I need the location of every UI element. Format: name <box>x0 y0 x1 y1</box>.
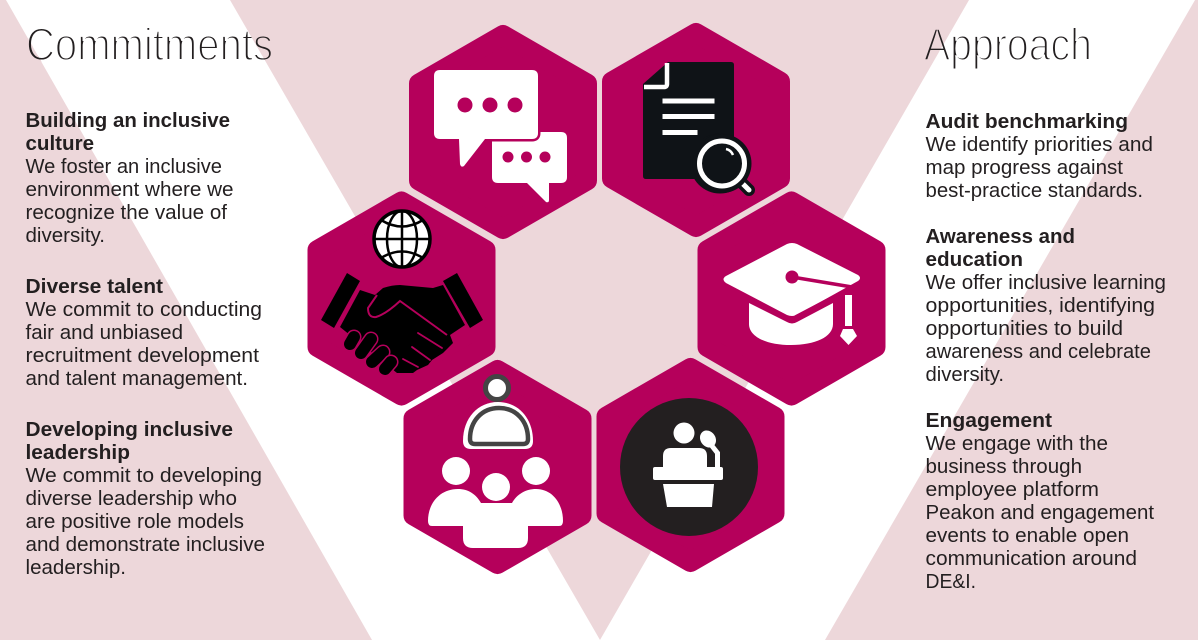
icon: graduation cap <box>724 243 860 345</box>
text block: audit benchmarking <box>926 111 1153 202</box>
icon: document with magnifier <box>643 62 752 194</box>
text block: developing inclusive leadership: and demonstrate inclusive <box>26 534 265 556</box>
panel: approach <box>924 19 1166 593</box>
text block: building an inclusive culture: culture <box>26 133 94 155</box>
text block: building an inclusive culture: environment where we <box>26 179 234 201</box>
hexagon: chat <box>419 35 587 229</box>
text block: engagement: business through <box>926 456 1082 478</box>
text block: audit benchmarking: map progress against <box>926 157 1123 179</box>
text block: building an inclusive culture: Building an inclusive <box>26 110 230 132</box>
hexagon: graduation cap <box>708 202 876 396</box>
text block: diverse talent: Diverse talent <box>26 276 163 298</box>
panel: commitments <box>26 19 273 579</box>
text block: diverse talent: We commit to conducting <box>26 299 262 321</box>
text block: developing inclusive leadership: leadership <box>26 442 130 464</box>
text block: building an inclusive culture: recognize the value of <box>26 202 227 224</box>
hexagon: audience <box>414 370 582 564</box>
text block: awareness and education: opportunities, identifying <box>926 295 1155 317</box>
icon: speaker at podium <box>620 398 758 536</box>
hexagon: document <box>612 33 780 227</box>
text block: engagement <box>926 410 1154 593</box>
text block: engagement: DE&I. <box>926 571 976 593</box>
text block: engagement: communication around <box>926 548 1137 570</box>
text block: awareness and education: diversity. <box>926 364 1004 386</box>
text block: building an inclusive culture: diversity. <box>26 225 105 247</box>
text block: awareness and education <box>926 226 1166 386</box>
hexagon: handshake <box>318 202 486 396</box>
text block: developing inclusive leadership: Developing inclusive <box>26 419 233 441</box>
text block: engagement: We engage with the <box>926 433 1108 455</box>
text block: building an inclusive culture <box>26 110 234 247</box>
heading: Approach: Approach <box>924 19 1092 70</box>
text block: engagement: employee platform <box>926 479 1099 501</box>
icon: presenter and audience <box>428 376 563 548</box>
text block: awareness and education: education <box>926 249 1023 271</box>
text block: audit benchmarking: We identify priorities and <box>926 134 1153 156</box>
text block: engagement: Engagement <box>926 410 1052 432</box>
text block: developing inclusive leadership <box>26 419 265 579</box>
text block: audit benchmarking: best-practice standards. <box>926 180 1143 202</box>
text block: diverse talent: and talent management. <box>26 368 248 390</box>
text block: diverse talent: recruitment development <box>26 345 259 367</box>
text block: developing inclusive leadership: leadership. <box>26 557 126 579</box>
text block: developing inclusive leadership: We commit to developing <box>26 465 262 487</box>
hexagon: podium <box>606 368 774 562</box>
text block: developing inclusive leadership: are positive role models <box>26 511 244 533</box>
text block: awareness and education: awareness and celebrate <box>926 341 1151 363</box>
icon: globe <box>374 211 430 267</box>
text block: engagement: events to enable open <box>926 525 1129 547</box>
text block: diverse talent: fair and unbiased <box>26 322 183 344</box>
text block: diverse talent <box>26 276 262 390</box>
text block: awareness and education: We offer inclusive learning <box>926 272 1166 294</box>
text block: audit benchmarking: Audit benchmarking <box>926 111 1128 133</box>
icon: speech bubbles <box>434 70 567 202</box>
text block: awareness and education: opportunities to build <box>926 318 1123 340</box>
text block: engagement: Peakon and engagement <box>926 502 1154 524</box>
icon: handshake <box>321 273 483 373</box>
text block: awareness and education: Awareness and <box>926 226 1075 248</box>
text block: developing inclusive leadership: diverse leadership who <box>26 488 237 510</box>
text block: building an inclusive culture: We foster an inclusive <box>26 156 222 178</box>
heading: Commitments: Commitments <box>26 19 273 70</box>
